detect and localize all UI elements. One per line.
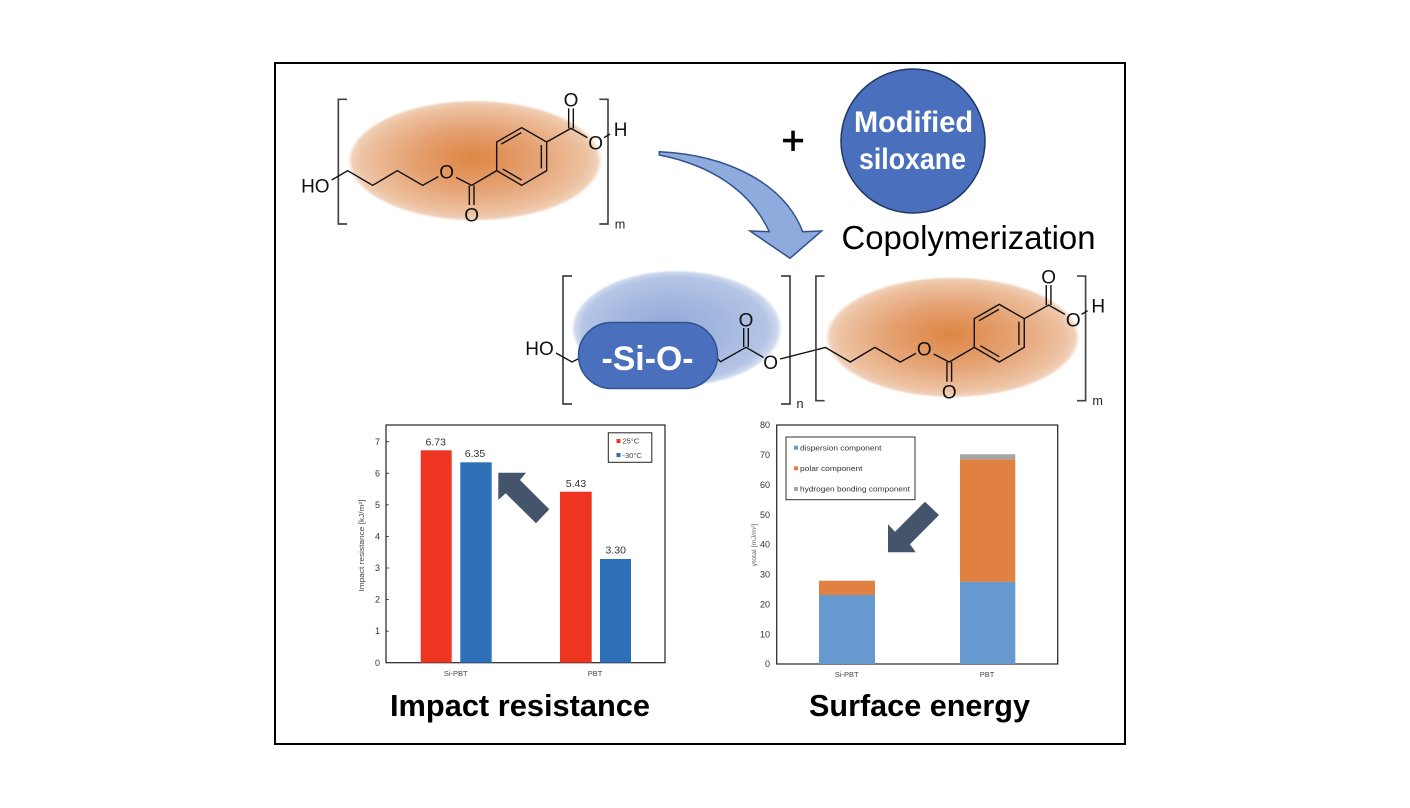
surface energy stacked bar chart: 80 [760,420,770,430]
impact resistance bar chart: 1 [375,626,380,636]
surface energy stacked bar chart [751,420,1058,679]
impact resistance bar chart: 3 [375,563,380,573]
siloxane block of copolymer [525,270,826,411]
PBT monomer structure: O [464,206,479,227]
PBT monomer structure: H [614,120,628,141]
plus sign: + [781,119,805,163]
PBT block of copolymer: m [1092,394,1103,408]
surface energy stacked bar chart: 50 [760,510,770,520]
PBT monomer structure [301,91,628,231]
bars [421,450,631,663]
siloxane block of copolymer: O [739,310,753,332]
x labels: Si-PBT [835,670,859,679]
PBT block of copolymer: O [1066,310,1081,331]
x labels: PBT [980,670,995,679]
modified siloxane circle: siloxane [859,143,966,176]
impact resistance bar chart: 5 [375,500,380,510]
legend: hydrogen bonding component [800,484,911,494]
surface energy stacked bar chart: 0 [765,659,770,669]
PBT monomer structure: O [588,134,603,155]
impact resistance heading: Impact resistance [390,688,650,723]
value labels: 6.35 [465,448,485,460]
legend: -30°C [622,451,642,460]
legend [786,437,915,500]
impact resistance bar chart [357,425,665,678]
arrow: impact resistance increase [498,473,549,523]
surface energy stacked bar chart: 30 [760,570,770,580]
PBT block of copolymer: O [917,339,932,360]
y axis label: Impact resistance [kJ/m²] [357,500,366,592]
impact resistance bar chart: 0 [375,658,380,668]
y axis label: γtotal [mJ/m²] [751,523,758,566]
surface energy stacked bar chart: 70 [760,450,770,460]
PBT block of copolymer: O [1041,267,1056,288]
x labels [835,670,995,679]
Si-O pill [578,322,718,388]
copolymerization label: Copolymerization [842,219,1096,256]
PBT monomer structure: O [439,163,454,184]
impact resistance bar chart: 4 [375,532,380,542]
impact resistance bar chart: 6 [375,468,380,478]
PBT monomer structure: HO [301,177,330,198]
siloxane block of copolymer: HO [525,339,554,360]
value labels: 6.73 [425,436,446,448]
value labels: 3.30 [605,544,626,556]
PBT monomer structure: m [615,217,625,231]
value labels [425,436,626,556]
legend: 25°C [622,436,640,446]
modified siloxane circle: Modified [854,106,973,139]
modified siloxane circle [841,69,985,213]
PBT block of copolymer: O [942,382,957,403]
surface energy heading: Surface energy [809,688,1031,723]
x labels: PBT [588,669,603,678]
legend [608,433,652,462]
value labels: 5.43 [566,478,586,490]
surface energy stacked bar chart: 40 [760,540,770,550]
reaction arrow [659,152,822,258]
x labels [444,669,603,678]
arrow: surface energy decrease [888,502,939,552]
PBT block of copolymer: H [1091,297,1105,318]
siloxane block of copolymer: n [796,396,804,411]
x labels: Si-PBT [444,669,468,678]
surface energy stacked bar chart: 60 [760,480,770,490]
legend: polar component [800,464,864,473]
outer frame [275,63,1125,744]
PBT block of copolymer [816,267,1105,408]
surface energy stacked bar chart: 10 [760,630,770,640]
PBT monomer structure: O [564,91,578,112]
impact resistance bar chart: 2 [375,595,380,605]
legend: dispersion component [800,444,883,452]
Si-O pill: -Si-O- [602,340,694,378]
siloxane block of copolymer: O [763,353,778,374]
stacked bars [819,454,1015,664]
surface energy stacked bar chart: 20 [760,600,770,610]
impact resistance bar chart: 7 [375,437,380,447]
